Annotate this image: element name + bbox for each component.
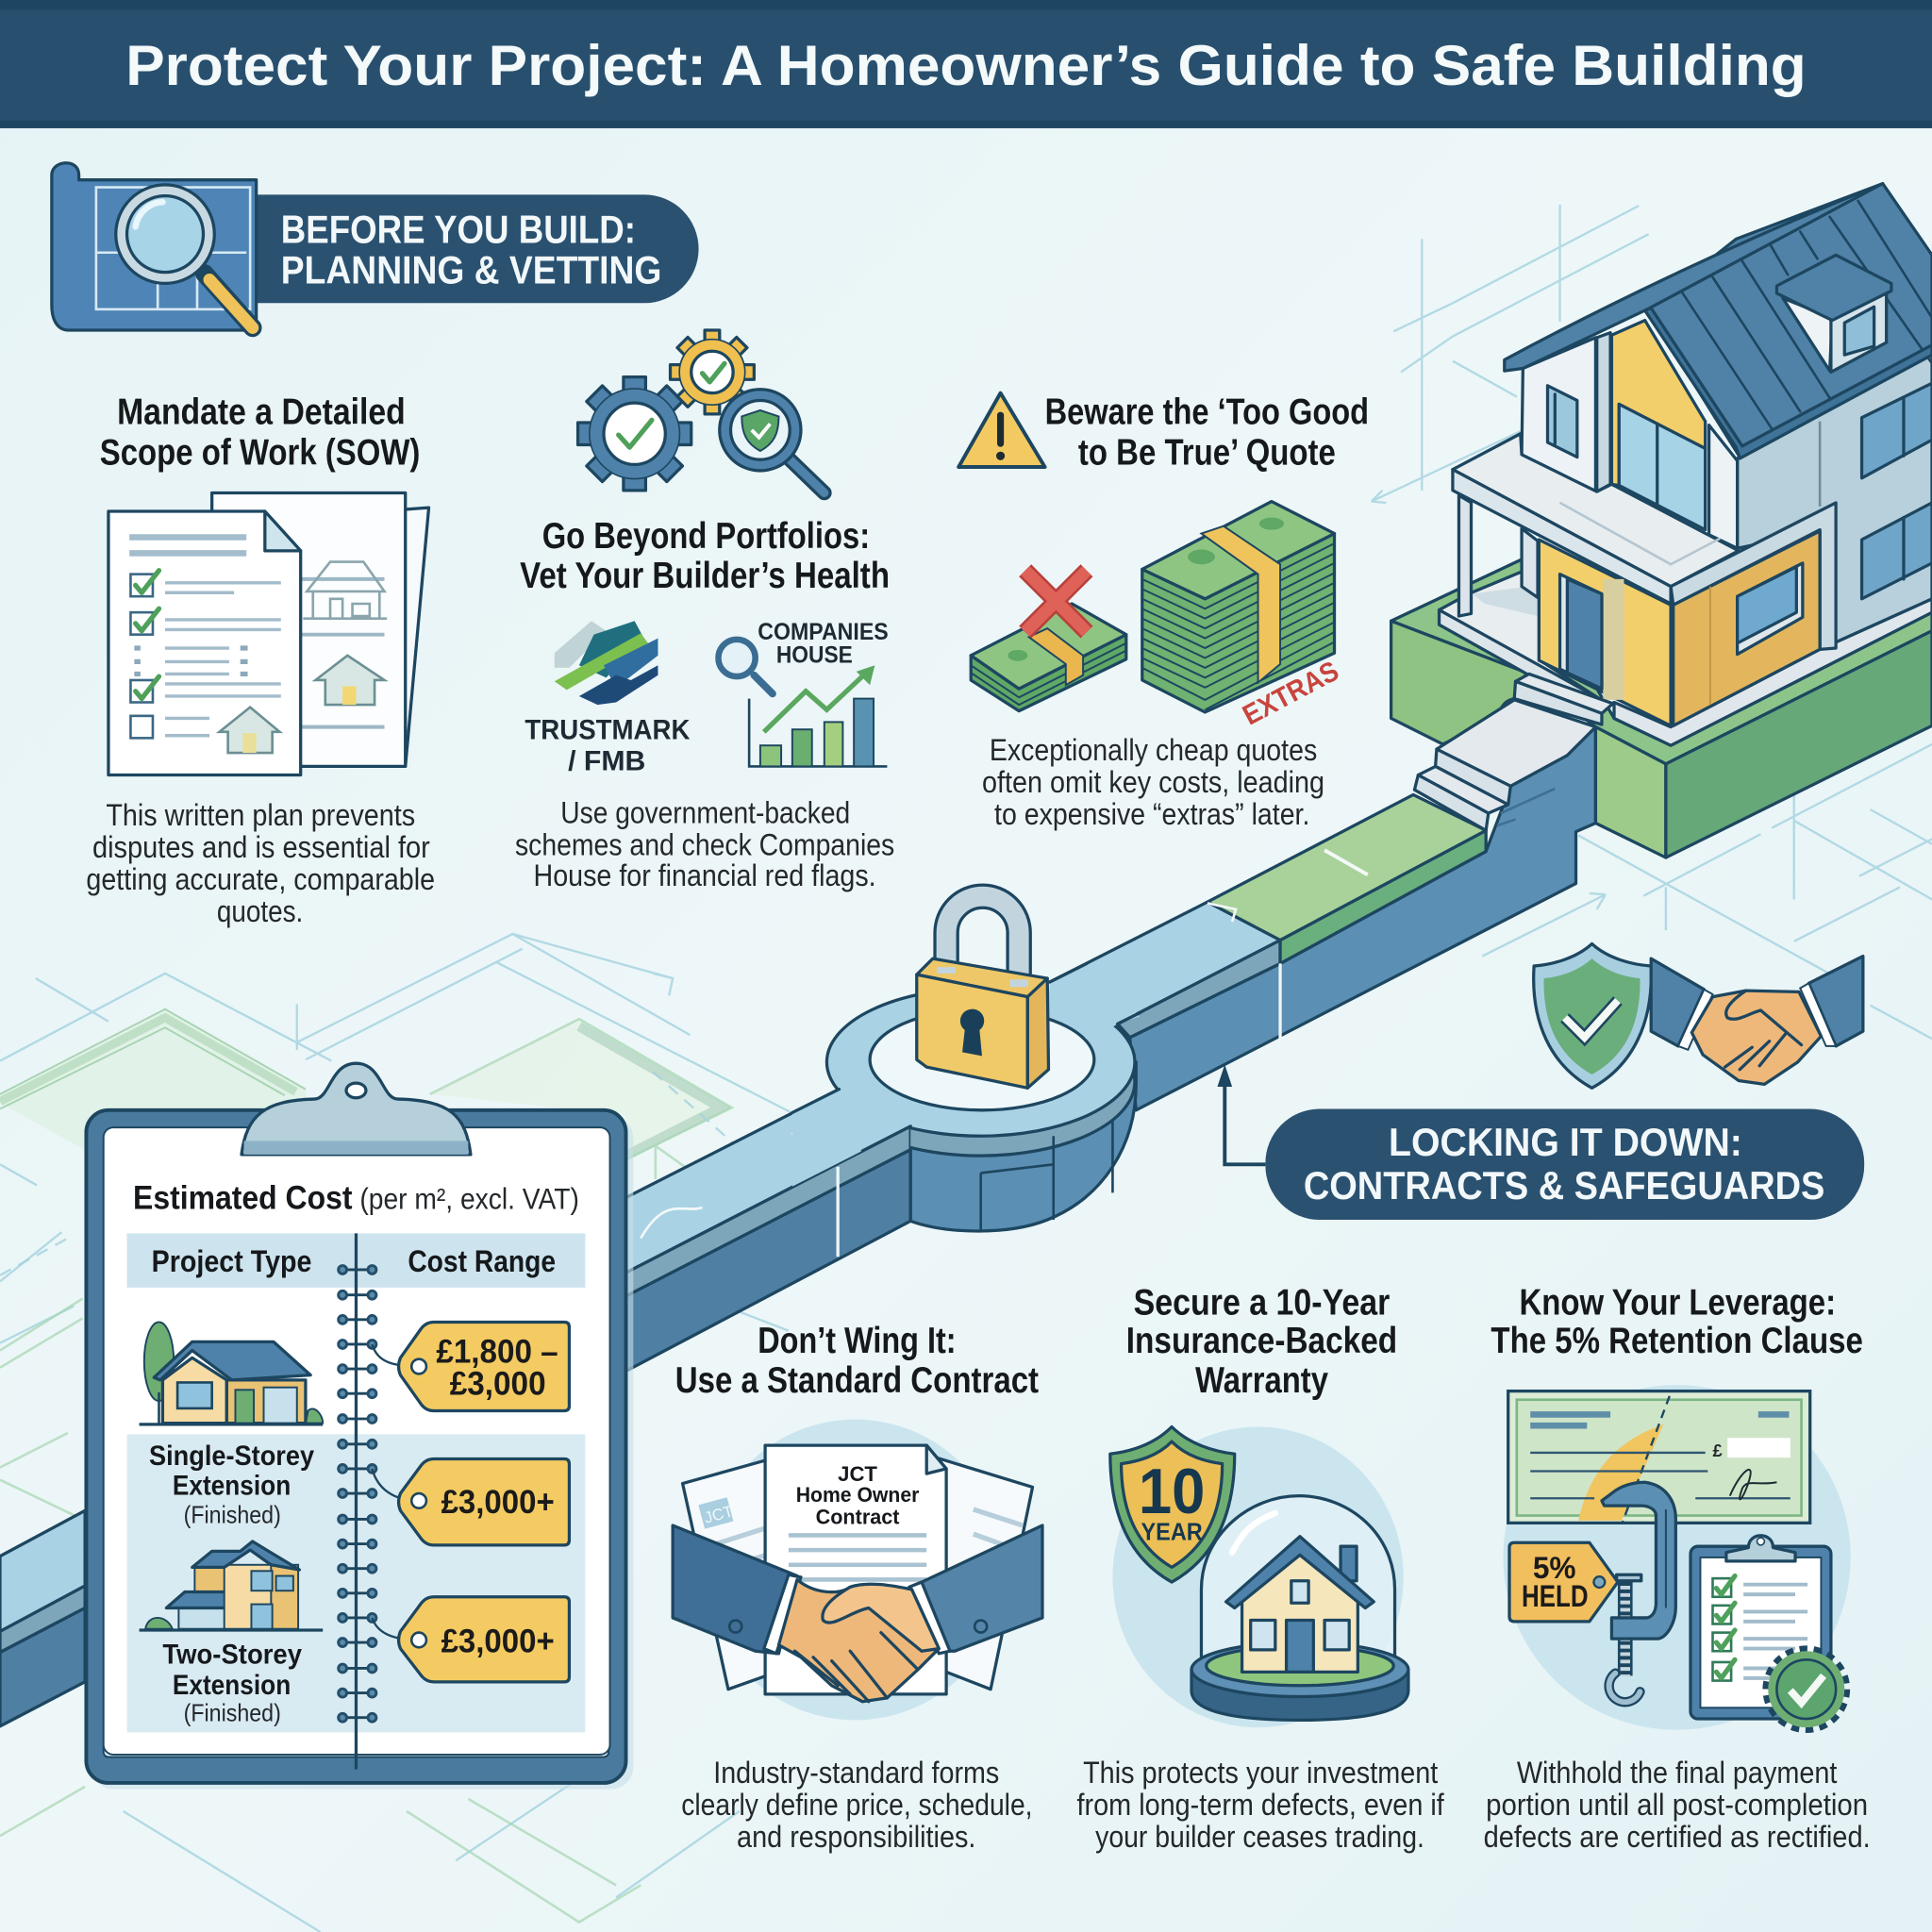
heading text: BEFORE YOU BUILD: — [281, 207, 636, 251]
body text: Use government-backed — [560, 794, 850, 829]
icon: contract documents — [683, 1445, 1033, 1694]
body text — [515, 794, 894, 892]
icon: shield 10 year: YEAR — [1141, 1518, 1203, 1546]
icon: house in glass dome — [1191, 1496, 1408, 1720]
label: single-storey: Extension — [173, 1470, 291, 1501]
icon: handshake — [673, 1525, 1042, 1702]
upper storey — [1522, 321, 1738, 548]
heading: Don’t Wing It: — [758, 1321, 957, 1361]
panel: scope of work — [86, 391, 435, 928]
foundation road path — [0, 727, 1595, 1726]
section header: locking it down: CONTRACTS & SAFEGUARDS — [1304, 1163, 1824, 1208]
label: extras: EXTRAS — [1238, 656, 1344, 731]
label: single-storey: (Finished) — [184, 1500, 281, 1528]
table header: Cost Range — [408, 1243, 556, 1278]
price tag: 3000+ b: £3,000+ — [441, 1624, 555, 1660]
panel: vet your builder — [515, 330, 894, 892]
logo: companies house chart: HOUSE — [776, 643, 853, 669]
logo: trustmark: / FMB — [568, 745, 645, 776]
section header: before you build: PLANNING & VETTING — [281, 247, 661, 291]
tag: 5% held: 5% — [1533, 1550, 1576, 1585]
title banner — [0, 0, 1932, 128]
shackle — [946, 896, 1019, 983]
logo: trustmark — [525, 621, 691, 776]
heading: to Be True’ Quote — [1078, 432, 1336, 473]
body text — [982, 732, 1324, 831]
body text: This written plan prevents — [106, 797, 415, 832]
heading: Warranty — [1195, 1360, 1328, 1401]
icon: red cross — [1025, 571, 1087, 632]
body text: Industry-standard forms — [713, 1755, 999, 1790]
panel: standard contract — [673, 1321, 1042, 1854]
icon: two-storey house — [140, 1541, 323, 1630]
price tag: 3000+ a — [372, 1458, 569, 1545]
clipboard board — [92, 1116, 633, 1789]
tag: 5% held: HELD — [1522, 1578, 1589, 1613]
heading: Go Beyond Portfolios: — [542, 516, 870, 557]
body text — [86, 797, 435, 928]
icon: warning triangle — [958, 393, 1045, 467]
icon: gears and magnifier — [578, 330, 824, 492]
wall right — [1738, 355, 1932, 649]
icon: shield and handshake — [1534, 943, 1863, 1088]
balcony — [1453, 434, 1836, 649]
padlock on foundation ring — [792, 896, 1140, 1232]
connector arrow — [1217, 1064, 1265, 1164]
heading — [1126, 1283, 1397, 1401]
icon: g-clamp — [1602, 1482, 1675, 1702]
tag: 5% held — [1509, 1542, 1618, 1622]
price tag: 3000+ a: £3,000+ — [441, 1484, 555, 1521]
price tag: 3000+ b — [372, 1597, 569, 1682]
panel: cost clipboard — [86, 1063, 633, 1789]
logo: trustmark: TRUSTMARK — [525, 715, 691, 746]
body text: quotes. — [217, 893, 303, 928]
heading: Insurance-Backed — [1126, 1321, 1397, 1361]
label: two-storey: Extension — [173, 1670, 291, 1701]
icon: approval badge — [1768, 1651, 1844, 1727]
house — [1391, 184, 1932, 858]
body text: Withhold the final payment — [1517, 1755, 1837, 1790]
ground floor — [1539, 531, 1820, 725]
icon: large cash stack — [1142, 502, 1335, 712]
body text: and responsibilities. — [737, 1819, 975, 1854]
icon: documents — [108, 492, 429, 775]
body text: portion until all post-completion — [1486, 1787, 1868, 1822]
label: two-storey: (Finished) — [184, 1699, 281, 1727]
heading: Scope of Work (SOW) — [100, 432, 420, 473]
icon: single-storey house — [140, 1322, 323, 1424]
panel: too good to be true quote — [958, 391, 1369, 831]
heading — [675, 1321, 1039, 1401]
dormer — [1776, 255, 1891, 372]
body text — [1484, 1755, 1871, 1854]
label: single-storey: Single-Storey — [149, 1441, 314, 1472]
body text — [681, 1755, 1033, 1854]
roof — [1505, 184, 1932, 458]
price tag: 1800-3000 — [372, 1322, 569, 1411]
body text: This protects your investment — [1083, 1755, 1438, 1790]
pill — [1265, 1109, 1864, 1220]
title: Protect Your Project: A Homeowner’s Guide to Safe Building — [125, 34, 1807, 97]
icon: blueprint with magnifier — [52, 163, 257, 330]
clip — [242, 1063, 471, 1155]
icon: shield 10 year: 10 — [1139, 1457, 1205, 1527]
table title: (per m², excl. VAT) — [359, 1182, 579, 1215]
body text: disputes and is essential for — [92, 829, 430, 864]
green plinth — [1391, 559, 1932, 858]
pill — [234, 194, 699, 303]
heading: Beware the ‘Too Good — [1045, 391, 1369, 432]
section header: locking it down — [1217, 1064, 1864, 1220]
icon: house sketch — [303, 562, 387, 619]
icon: contract documents: JCT — [702, 1502, 735, 1527]
logo: companies house chart — [718, 620, 889, 766]
label: two-storey — [162, 1639, 302, 1727]
label: single-storey — [149, 1441, 314, 1528]
heading: Mandate a Detailed — [117, 391, 406, 432]
body text: Exceptionally cheap quotes — [990, 732, 1317, 767]
contract title: Contract — [816, 1506, 900, 1529]
price tag: 1800-3000: £3,000 — [450, 1366, 546, 1403]
lock body — [917, 958, 1049, 1088]
porch deck — [1440, 572, 1932, 745]
heading: Know Your Leverage: — [1519, 1283, 1836, 1324]
icon: small cash stack — [971, 604, 1126, 711]
heading: The 5% Retention Clause — [1491, 1321, 1863, 1361]
body text: schemes and check Companies — [515, 826, 894, 861]
body text: getting accurate, comparable — [86, 861, 435, 896]
icon: shield 10 year — [1110, 1426, 1235, 1582]
body text: clearly define price, schedule, — [681, 1787, 1033, 1822]
section header: locking it down: LOCKING IT DOWN: — [1389, 1120, 1742, 1164]
label: two-storey: Two-Storey — [162, 1639, 302, 1670]
front steps — [1414, 674, 1613, 830]
section header: before you build — [52, 163, 699, 330]
contract title: Home Owner — [796, 1483, 920, 1507]
panel: retention clause — [1484, 1283, 1871, 1854]
contract title — [796, 1462, 920, 1529]
checkboxes — [130, 571, 158, 738]
ring — [792, 963, 1140, 1232]
body text: House for financial red flags. — [534, 858, 876, 892]
spiral binding — [342, 1233, 372, 1770]
icon: checklist clipboard — [1690, 1536, 1831, 1719]
logo: companies house chart: COMPANIES — [758, 620, 889, 645]
heading: Vet Your Builder’s Health — [520, 556, 890, 596]
heading: Secure a 10-Year — [1134, 1283, 1390, 1324]
body text: to expensive “extras” later. — [994, 796, 1309, 831]
body text: your builder ceases trading. — [1095, 1819, 1424, 1854]
body text: often omit key costs, leading — [982, 764, 1324, 799]
table title — [133, 1179, 579, 1216]
panel: warranty — [1077, 1283, 1445, 1854]
heading — [100, 391, 420, 473]
heading: Use a Standard Contract — [675, 1360, 1039, 1401]
heading — [520, 516, 890, 596]
table header: Project Type — [152, 1243, 311, 1278]
body text — [1077, 1755, 1445, 1854]
body text: from long-term defects, even if — [1077, 1787, 1445, 1822]
body text: defects are certified as rectified. — [1484, 1819, 1871, 1854]
contract title: JCT — [838, 1462, 877, 1486]
price tag: 1800-3000: £1,800 – — [436, 1334, 558, 1371]
right wall windows — [1862, 383, 1932, 599]
heading — [1045, 391, 1369, 473]
table title: Estimated Cost — [133, 1179, 353, 1216]
heading — [1491, 1283, 1863, 1361]
icon: cheque — [1508, 1391, 1810, 1523]
table header — [127, 1233, 585, 1288]
icon: cheque: £ — [1713, 1441, 1723, 1460]
